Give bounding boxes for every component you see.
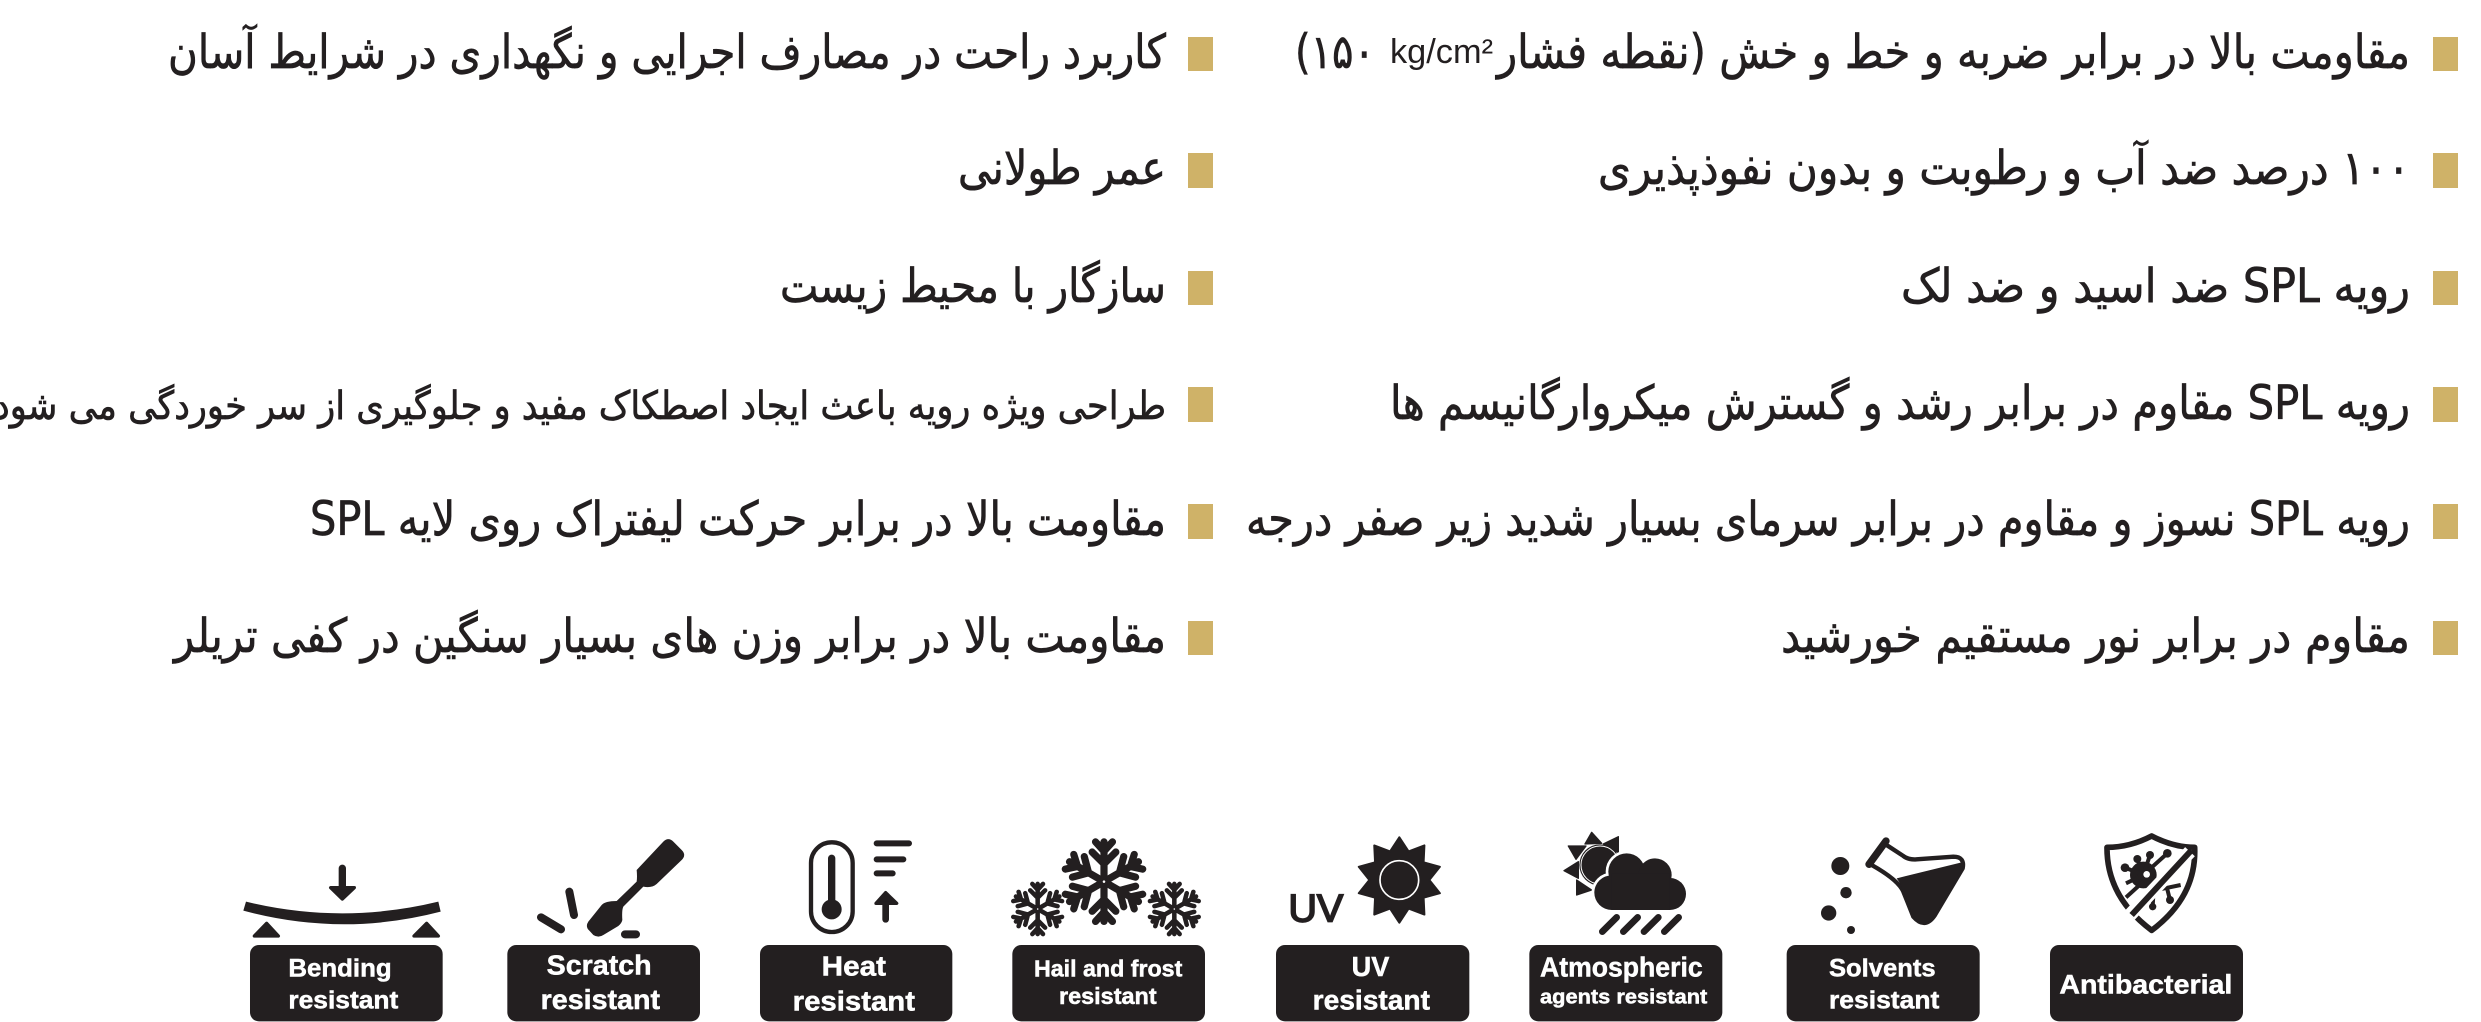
badge: atmospheric agents resistant <box>1529 832 1722 1021</box>
list item: microorganisms: رویه SPL مقاوم در برابر رشد و گسترش میکروارگانیسم ها <box>1390 376 2410 431</box>
panel: left feature list <box>0 23 1213 664</box>
label: antibacterial: Antibacterial <box>2059 969 2232 999</box>
label: atmospheric agents resistant: agents resistant <box>1540 985 1707 1008</box>
list item: sunlight: مقاوم در برابر نور مستقیم خورشید <box>1781 609 2410 664</box>
label: scratch resistant: resistant <box>541 984 660 1015</box>
label: hail and frost resistant <box>1012 945 1205 1021</box>
label: solvents resistant: resistant <box>1829 986 1940 1014</box>
panel: bending and scratch badges <box>243 839 700 1021</box>
label: heat resistant: resistant <box>793 986 915 1017</box>
badge: UV resistant <box>1276 837 1469 1021</box>
panel: heat and frost badges <box>760 842 1205 1021</box>
list item: fireproof and cold: رویه SPL نسوز و مقاوم در برابر سرمای بسیار شدید زیر صفر درجه <box>1246 492 2410 547</box>
label: bending resistant: resistant <box>288 986 399 1014</box>
list item: heavy loads: مقاومت بالا در برابر وزن های بسیار سنگین در کفی تریلر <box>172 609 1166 664</box>
icon: scraper tool <box>541 839 684 937</box>
icon: UV sun: UV <box>1288 888 1344 931</box>
icon: UV sun <box>1288 837 1440 931</box>
label: heat resistant: Heat <box>822 950 886 981</box>
list item: scratch resistance: kg/cm² <box>1390 33 1493 71</box>
badge: antibacterial <box>2050 836 2243 1021</box>
label: bending resistant: Bending <box>288 955 392 983</box>
list item: easy use: کاربرد راحت در مصارف اجرایی و نگهداری در شرایط آسان <box>168 23 1167 80</box>
label: hail and frost resistant: Hail and frost <box>1034 956 1183 982</box>
icon: thermometer <box>811 842 909 932</box>
icon: flask and drops <box>1821 841 1963 934</box>
panel: UV and atmospheric badges <box>1276 832 1722 1021</box>
label: UV resistant <box>1276 945 1469 1021</box>
badge: scratch resistant <box>507 839 700 1021</box>
list item: long life: عمر طولانی <box>958 141 1166 196</box>
list item: friction design: طراحی ویژه رویه باعث ایجاد اصطکاک مفید و جلوگیری از سر خوردگی می شود <box>0 384 1166 429</box>
list item: acid resistant: رویه SPL ضد اسید و ضد لک <box>1901 259 2410 314</box>
list item: waterproof: ۱۰۰ درصد ضد آب و رطوبت و بدون نفوذپذیری <box>1598 139 2410 196</box>
list item: lift truck: مقاومت بالا در برابر حرکت لیفتراک روی لایه SPL <box>310 492 1166 547</box>
icon: bending beam <box>243 868 441 936</box>
badge: solvents resistant <box>1787 841 1980 1021</box>
icon: shield with virus <box>2107 836 2195 930</box>
label: heat resistant <box>760 945 952 1021</box>
label: UV resistant: resistant <box>1313 984 1430 1015</box>
badge: hail and frost resistant <box>1012 842 1205 1021</box>
badge: heat resistant <box>760 842 952 1021</box>
panel: solvents and antibacterial badges <box>1787 836 2243 1021</box>
badge: bending resistant <box>243 868 443 1021</box>
label: UV resistant: UV <box>1352 951 1390 982</box>
list item: eco friendly: سازگار با محیط زیست <box>780 259 1166 314</box>
icon: snowflakes <box>1012 842 1200 934</box>
label: scratch resistant: Scratch <box>547 949 652 980</box>
icon: sun cloud rain <box>1564 832 1686 932</box>
label: solvents resistant: Solvents <box>1829 955 1936 983</box>
label: atmospheric agents resistant <box>1529 945 1722 1021</box>
label: solvents resistant <box>1787 945 1980 1021</box>
label: antibacterial <box>2050 945 2243 1021</box>
panel: right feature list <box>1246 25 2458 664</box>
list item: scratch resistance: ۱۵۰) <box>1295 25 1375 80</box>
label: hail and frost resistant: resistant <box>1059 983 1157 1009</box>
label: bending resistant <box>250 945 443 1021</box>
label: scratch resistant <box>507 945 700 1021</box>
label: atmospheric agents resistant: Atmospheric <box>1540 952 1703 983</box>
